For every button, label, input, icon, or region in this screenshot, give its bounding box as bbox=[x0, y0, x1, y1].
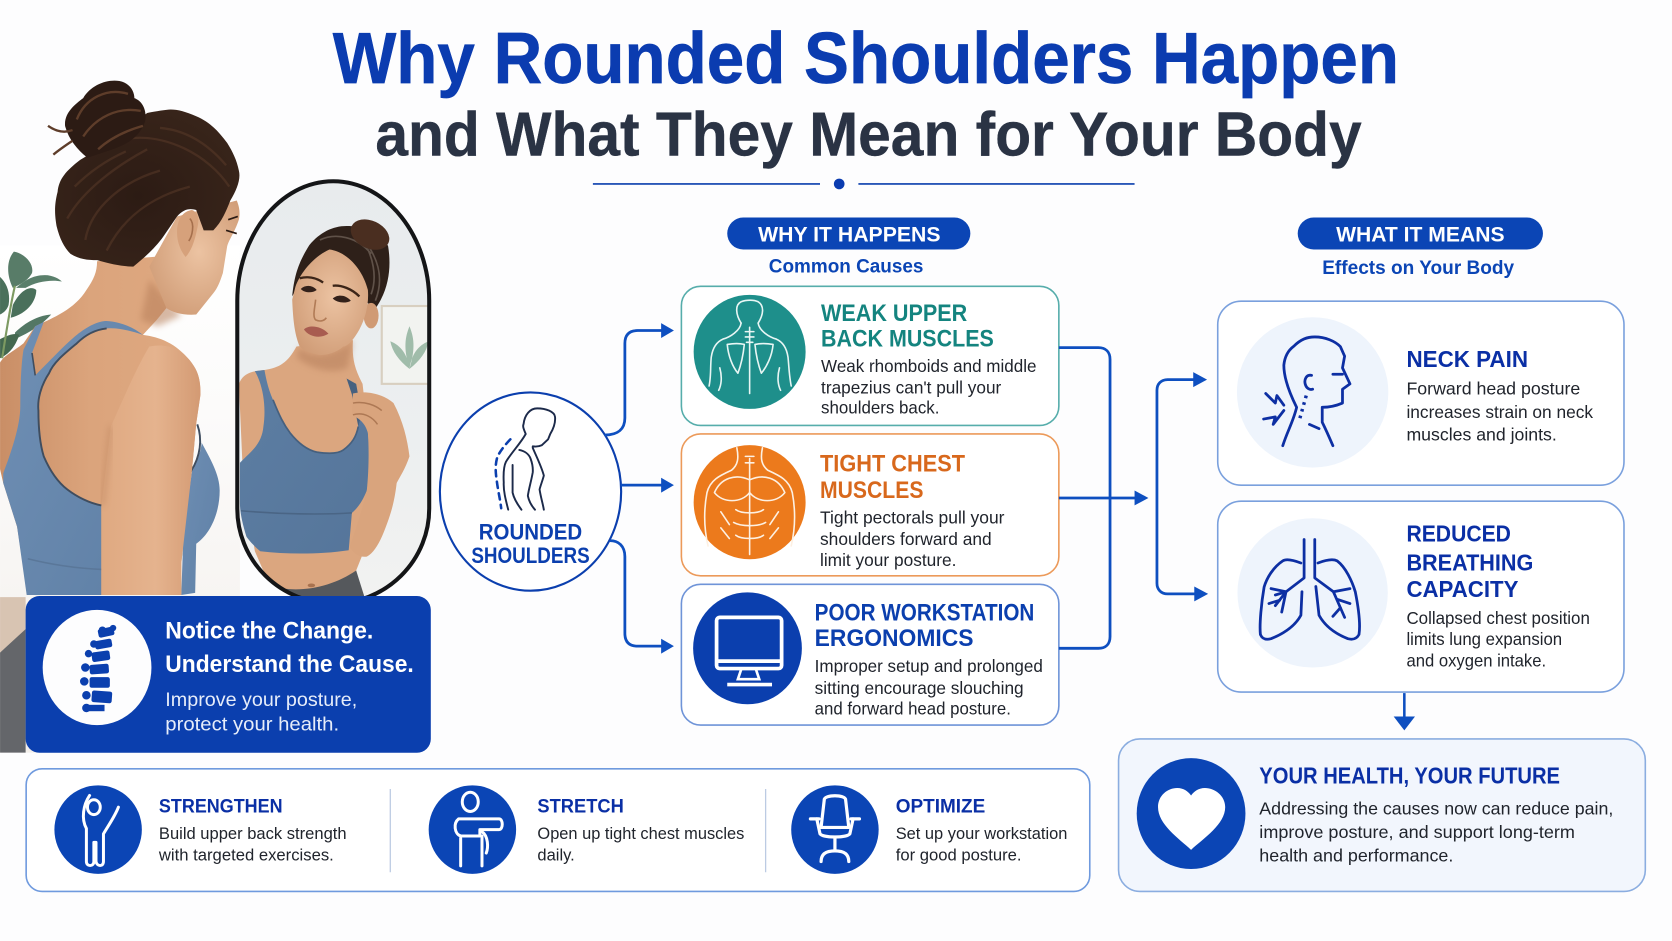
callout: notice the change bbox=[26, 596, 431, 753]
under chin shadow bbox=[141, 279, 181, 326]
optimize text: Set up your workstation bbox=[896, 824, 1067, 843]
action: optimize bbox=[791, 785, 1067, 874]
card: tight chest muscles: shoulders forward and bbox=[820, 529, 992, 549]
card: poor workstation ergonomics bbox=[681, 584, 1059, 725]
reflection arm and hand bbox=[350, 392, 409, 557]
card: neck pain: increases strain on neck bbox=[1406, 402, 1593, 422]
card 1 title: WEAK UPPER bbox=[821, 300, 967, 327]
card: reduced breathing capacity bbox=[1218, 501, 1624, 692]
panel: actions strip bbox=[26, 769, 1090, 891]
heading: what it means bbox=[1298, 218, 1543, 279]
heading: what it means: Effects on Your Body bbox=[1322, 257, 1514, 279]
card: reduced breathing capacity: BREATHING bbox=[1406, 549, 1533, 575]
reflection ear bbox=[364, 303, 379, 328]
arrow: down to health bbox=[1394, 693, 1415, 730]
hair bbox=[55, 110, 239, 267]
card: poor workstation ergonomics: sitting encourage slouching bbox=[815, 678, 1024, 698]
card 3 text: Improper setup and prolonged bbox=[815, 656, 1043, 676]
icon: stretching figure bbox=[429, 785, 516, 874]
hair bun bbox=[65, 81, 146, 158]
card: weak upper back muscles bbox=[681, 286, 1059, 425]
circle label: ROUNDED bbox=[479, 520, 582, 545]
card: poor workstation ergonomics: ERGONOMICS bbox=[815, 625, 974, 652]
back and neck skin bbox=[0, 256, 200, 595]
photo: woman looking in mirror bbox=[0, 81, 437, 763]
callout text: Improve your posture, bbox=[165, 689, 357, 711]
panel: your health your future: health and performance. bbox=[1259, 846, 1453, 866]
strengthen title: STRENGTHEN bbox=[159, 797, 283, 818]
panel: your health your future bbox=[1119, 739, 1645, 891]
card: reduced breathing capacity: limits lung expansion bbox=[1406, 629, 1562, 649]
action: stretch bbox=[429, 785, 744, 874]
neck pain title: NECK PAIN bbox=[1406, 346, 1528, 372]
card: weak upper back muscles: trapezius can't pull your bbox=[821, 377, 1001, 397]
wall behind woman bbox=[0, 514, 240, 752]
arrows: causes branch bbox=[605, 323, 674, 654]
reflection hair bbox=[292, 226, 389, 307]
framed picture bbox=[382, 306, 435, 384]
breathing text: Collapsed chest position bbox=[1406, 608, 1590, 628]
white gap below callout bbox=[0, 753, 437, 763]
health title: YOUR HEALTH, YOUR FUTURE bbox=[1259, 763, 1560, 789]
back view figure bbox=[0, 81, 240, 753]
health text: Addressing the causes now can reduce pain, bbox=[1259, 799, 1613, 819]
callout: notice the change: protect your health. bbox=[165, 713, 339, 735]
ear bbox=[177, 210, 198, 257]
icon: hunched person bbox=[496, 408, 555, 510]
heading: why it happens: WHY IT HAPPENS bbox=[758, 223, 940, 247]
rounded shoulders circle: SHOULDERS bbox=[471, 543, 590, 568]
card: weak upper back muscles: BACK MUSCLES bbox=[821, 326, 994, 353]
tank top side panel bbox=[181, 423, 220, 595]
arrows: causes to effects bbox=[1059, 348, 1208, 648]
neck pain text: Forward head posture bbox=[1406, 379, 1580, 399]
icon: neck pain bbox=[1237, 317, 1388, 468]
icon: chest muscles bbox=[694, 445, 806, 559]
card: neck pain bbox=[1218, 301, 1624, 485]
action: strengthen: with targeted exercises. bbox=[158, 845, 334, 864]
heading: why it happens bbox=[727, 218, 970, 277]
callout heading: Notice the Change. bbox=[165, 618, 373, 645]
reflection pants bbox=[286, 570, 364, 596]
action: stretch: daily. bbox=[537, 845, 575, 864]
heading: what it means: WHAT IT MEANS bbox=[1336, 223, 1505, 247]
card 3 title: POOR WORKSTATION bbox=[815, 600, 1034, 627]
heading: why it happens: Common Causes bbox=[769, 255, 923, 277]
arm bbox=[101, 346, 200, 595]
icon: monitor bbox=[693, 592, 802, 704]
hair strands bbox=[67, 128, 229, 251]
card: weak upper back muscles: shoulders back. bbox=[821, 398, 939, 418]
card 2 text: Tight pectorals pull your bbox=[820, 508, 1005, 528]
reflection body skin bbox=[239, 340, 368, 590]
icon: back muscles bbox=[694, 295, 806, 409]
card: tight chest muscles: limit your posture. bbox=[820, 550, 956, 570]
icon: raised arms figure bbox=[54, 785, 142, 874]
stretch title: STRETCH bbox=[537, 797, 624, 818]
action: strengthen bbox=[54, 785, 347, 874]
panel: your health your future: improve posture, and support long-term bbox=[1259, 822, 1575, 842]
tank trim bbox=[38, 328, 107, 505]
card: poor workstation ergonomics: and forward head posture. bbox=[815, 698, 1011, 718]
optimize title: OPTIMIZE bbox=[896, 797, 985, 818]
card 2 title: TIGHT CHEST bbox=[820, 450, 965, 477]
icon: office chair bbox=[791, 785, 879, 874]
card: tight chest muscles: MUSCLES bbox=[820, 477, 923, 504]
mirror bbox=[237, 181, 435, 608]
callout: notice the change: Understand the Cause. bbox=[165, 651, 414, 678]
card: neck pain: muscles and joints. bbox=[1406, 424, 1557, 444]
reflection tank bbox=[240, 370, 370, 554]
card: reduced breathing capacity: CAPACITY bbox=[1406, 576, 1519, 602]
card 1 text: Weak rhomboids and middle bbox=[821, 356, 1036, 376]
action: optimize: for good posture. bbox=[896, 845, 1022, 864]
stretch text: Open up tight chest muscles bbox=[537, 824, 744, 843]
breathing title: REDUCED bbox=[1406, 521, 1511, 547]
tank top back bbox=[3, 321, 143, 595]
strengthen text: Build upper back strength bbox=[159, 824, 347, 843]
card: reduced breathing capacity: and oxygen intake. bbox=[1406, 650, 1546, 670]
rounded shoulders circle bbox=[440, 392, 621, 591]
title: Why Rounded Shoulders Happen bbox=[333, 18, 1399, 99]
card: tight chest muscles bbox=[681, 434, 1059, 576]
reflection far strap bbox=[347, 379, 368, 433]
title: and What They Mean for Your Body bbox=[375, 101, 1362, 170]
reflection face bbox=[292, 250, 368, 355]
reflection features bbox=[300, 277, 359, 296]
icon: heart bbox=[1137, 758, 1245, 869]
title bbox=[333, 18, 1399, 189]
icon: lungs bbox=[1237, 518, 1388, 667]
reflection bun bbox=[350, 219, 390, 250]
icon: spine bbox=[43, 610, 151, 725]
hip and pants bbox=[0, 597, 26, 653]
icon: plant bbox=[0, 252, 62, 358]
face bbox=[149, 200, 240, 315]
